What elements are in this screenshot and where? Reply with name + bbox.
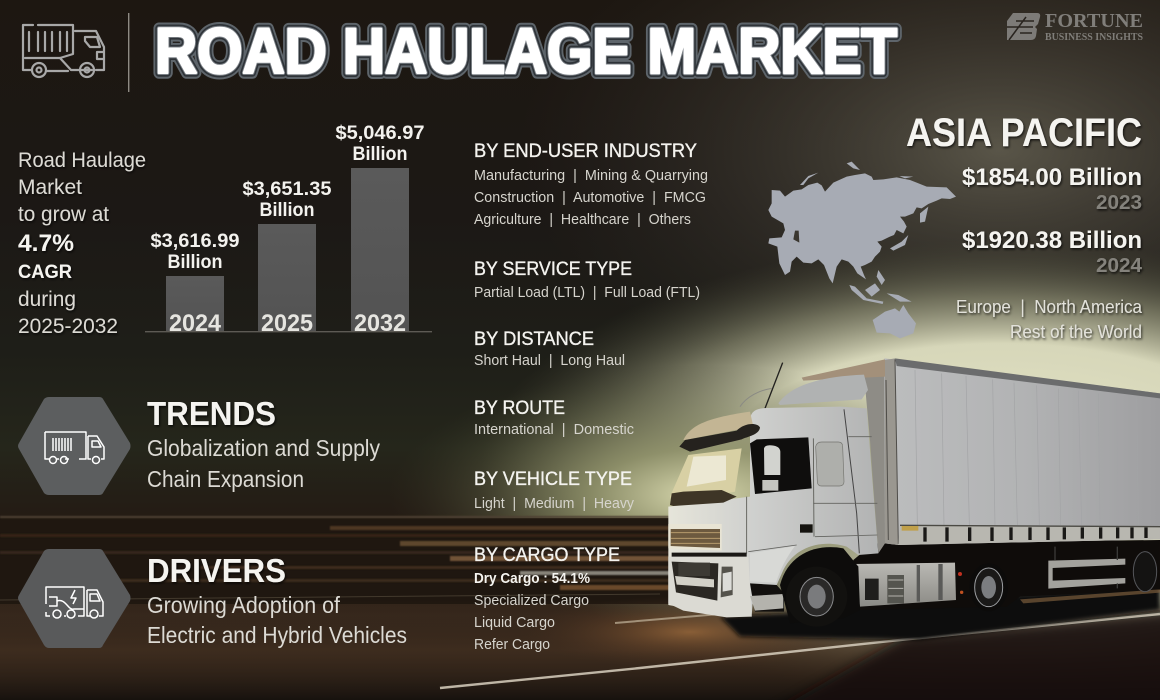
segment list: by service type: BY SERVICE TYPE xyxy=(474,259,632,280)
brand logo: Fortune Business Insights: BUSINESS INSIGHTS xyxy=(1045,32,1143,43)
segment list: by route: BY ROUTE xyxy=(474,398,565,419)
bar chart: market size: Billion xyxy=(260,199,314,221)
bar chart: market size: Billion xyxy=(168,251,222,273)
CAGR summary text: during xyxy=(18,288,76,311)
segment list: by end-user industry: Construction | Automotive | FMCG xyxy=(474,190,706,206)
trailer chassis xyxy=(853,540,1160,610)
rear wheels xyxy=(969,563,1008,611)
segment list: by vehicle type xyxy=(474,469,635,512)
segment list: by end-user industry: Manufacturing | Mining & Quarrying xyxy=(474,168,708,184)
segment list: by cargo type xyxy=(474,545,620,653)
panel: trends xyxy=(18,395,380,495)
segment list: by service type xyxy=(474,259,700,301)
brand logo: Fortune Business Insights: FORTUNE xyxy=(1045,10,1143,32)
bar 2025 xyxy=(258,224,316,332)
segment list: by distance xyxy=(474,329,625,369)
brand logo: Fortune Business Insights xyxy=(1007,10,1143,43)
panel: drivers: Electric and Hybrid Vehicles xyxy=(147,622,407,648)
fuel tank and steps xyxy=(853,563,956,607)
segment list: by route: International | Domestic xyxy=(474,422,634,438)
segment list: by end-user industry: BY END-USER INDUSTRY xyxy=(474,141,697,162)
grille xyxy=(668,524,722,551)
bar chart: market size: 2025 xyxy=(261,310,313,337)
segment list: by distance: Short Haul | Long Haul xyxy=(474,353,625,369)
title: ROAD HAULAGE MARKET xyxy=(155,15,897,87)
bar chart: market size: $3,616.99 xyxy=(150,230,240,252)
regional figures: Asia Pacific xyxy=(906,111,1143,342)
title: ROAD HAULAGE MARKET xyxy=(155,15,897,87)
segment list: by end-user industry xyxy=(474,141,708,228)
panel: trends: Globalization and Supply xyxy=(147,435,380,461)
front wheel xyxy=(780,547,860,623)
regional figures: Asia Pacific: Europe | North America xyxy=(956,297,1143,317)
CAGR summary text: Market xyxy=(18,176,82,199)
bar chart: market size: $3,651.35 xyxy=(242,178,332,200)
bar 2024 xyxy=(166,276,224,332)
shadow under truck xyxy=(720,585,1160,640)
panel: drivers: DRIVERS xyxy=(147,552,286,589)
segment list: by cargo type: BY CARGO TYPE xyxy=(474,545,620,566)
title: ROAD HAULAGE MARKET xyxy=(155,15,897,87)
bar chart: market size: $5,046.97 xyxy=(336,122,424,144)
CAGR summary text: to grow at xyxy=(18,203,109,226)
roof fairing and rail xyxy=(802,359,885,381)
regional figures: Asia Pacific: $1854.00 Billion xyxy=(962,164,1142,191)
CAGR summary text: 4.7% xyxy=(18,230,74,257)
visor and windscreen xyxy=(683,412,753,440)
segment list: by vehicle type: BY VEHICLE TYPE xyxy=(474,469,632,490)
bar 2032 xyxy=(351,168,409,332)
CAGR summary text xyxy=(18,149,146,338)
cab body xyxy=(668,407,878,617)
CAGR summary text: 2025-2032 xyxy=(18,315,118,338)
segment list: by cargo type: Refer Cargo xyxy=(474,637,550,653)
logo icon: truck outline xyxy=(23,25,104,77)
regional figures: Asia Pacific: 2024 xyxy=(1096,255,1143,277)
panel: drivers xyxy=(18,549,407,648)
vertical divider xyxy=(128,13,129,92)
segment list: by route xyxy=(474,398,634,438)
trailer box xyxy=(884,358,1160,545)
CAGR summary text: CAGR xyxy=(18,262,72,283)
bumper and lower front xyxy=(668,557,752,617)
bar chart: market size: 2032 xyxy=(354,310,406,337)
regional figures: Asia Pacific: $1920.38 Billion xyxy=(962,227,1142,254)
segment list: by cargo type: Specialized Cargo xyxy=(474,593,589,609)
segment list: by service type: Partial Load (LTL) | Full Load (FTL) xyxy=(474,285,700,301)
panel: trends: TRENDS xyxy=(147,395,276,432)
segment list: by cargo type: Liquid Cargo xyxy=(474,615,555,631)
side step and arch panel xyxy=(750,583,784,612)
hexagon with truck icon xyxy=(18,397,130,495)
panel: trends: Chain Expansion xyxy=(147,466,304,492)
segment list: by distance: BY DISTANCE xyxy=(474,329,594,350)
regional figures: Asia Pacific: Rest of the World xyxy=(1010,322,1142,342)
segment list: by cargo type: Dry Cargo : 54.1% xyxy=(474,571,590,587)
segment list: by end-user industry: Agriculture | Healthcare | Others xyxy=(474,212,691,228)
map: Asia Pacific xyxy=(768,162,956,338)
bar chart: market size: Billion xyxy=(352,143,408,165)
gap between cab and trailer xyxy=(864,360,885,553)
CAGR summary text: Road Haulage xyxy=(18,149,146,172)
hexagon with electric truck icon xyxy=(18,549,130,648)
segment list: by vehicle type: Light | Medium | Heavy xyxy=(474,496,635,512)
regional figures: Asia Pacific: 2023 xyxy=(1096,192,1142,214)
truck photo illustration xyxy=(668,358,1160,640)
bar chart: market size: 2024 xyxy=(169,310,222,337)
panel: drivers: Growing Adoption of xyxy=(147,592,341,618)
title: ROAD HAULAGE MARKET xyxy=(155,15,897,87)
bar chart: market size xyxy=(145,122,432,337)
